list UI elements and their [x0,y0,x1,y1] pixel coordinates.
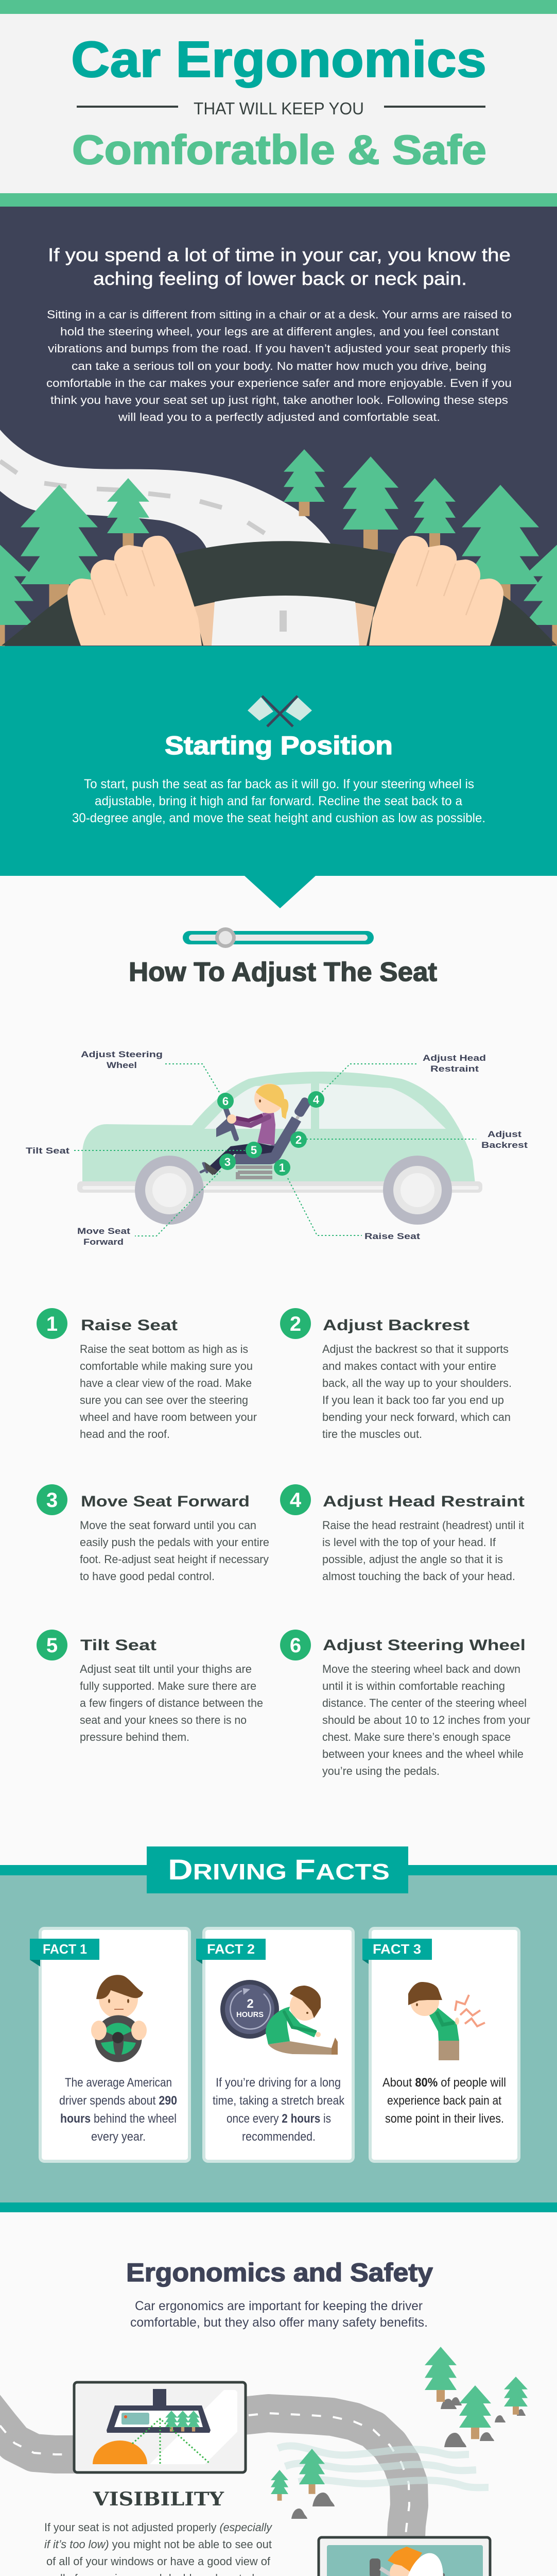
fact card 2 [196,1928,353,2161]
step 4: adjust head restraint: is level with the top of your head. If [322,1536,496,1549]
step 3: move seat forward [37,1484,269,1583]
text: ergonomics intro: comfortable, but they also offer many safety benefits. [130,2315,428,2330]
diagram labels [26,1049,528,1247]
illustration: left hand [67,536,202,646]
step 3: move seat forward: to have good pedal control. [80,1570,215,1583]
illustration: winding road [0,2406,557,2576]
intro heading [48,244,511,289]
heading: how to adjust: How To Adjust The Seat [129,957,437,987]
icon: two hour stretch break [220,1980,338,2055]
tag [362,1939,432,1964]
text: experience back pain at [387,2094,501,2108]
panel: title header [0,0,557,207]
illustration: rocks [20,2397,526,2576]
text: ergonomics intro: Car ergonomics are important for keeping the driver [135,2299,423,2313]
frame: rear view mirror [74,2382,246,2472]
intro paragraph: will lead you to a perfectly adjusted and comfortable seat. [118,411,440,423]
heading: VISIBILITY [93,2488,224,2510]
heading banner: DRIVING FACTS [168,1853,390,1886]
step 6: adjust steering wheel: distance. The center of the steering wheel [322,1697,527,1709]
step 1: raise seat: 1 [46,1313,58,1335]
illustration: forest trees [0,449,557,648]
text [59,2076,177,2144]
text: The average American [65,2076,172,2090]
step 4: adjust head restraint: possible, adjust the angle so that it is [322,1553,503,1566]
icon: driver with steering wheel [91,1975,147,2062]
step 3: move seat forward: easily push the pedals with your entire [80,1536,269,1549]
text: driver spends about 290 [59,2094,177,2108]
diagram labels: Adjust [488,1129,521,1139]
text: If you’re driving for a long [216,2076,341,2090]
diagram labels: Adjust Steering [81,1049,163,1059]
step 1: raise seat: head and the roof. [80,1428,170,1440]
text: if it’s too low) you might not be able to see out [44,2538,272,2551]
diagram labels: Adjust Head [423,1053,486,1063]
step 1: raise seat: comfortable while making sure you [80,1360,253,1372]
tag: FACT 2 [207,1941,255,1957]
text block: To start, push the seat as far back as it will go. If your steering wheel is [84,777,474,791]
step 1: raise seat: wheel and have room between your [79,1411,257,1423]
step 6: adjust steering wheel: 6 [290,1634,301,1657]
illustration: road [0,430,332,551]
icon: two hour stretch break: 2 [247,1997,254,2011]
step 3: move seat forward: 3 [46,1489,58,1512]
text: About 80% of people will [382,2076,506,2090]
text: hours behind the wheel [60,2112,177,2126]
intro paragraph: think you have your seat set up just right, take another look. Following these steps [50,394,508,406]
diagram labels: Move Seat [77,1226,130,1236]
step 5: tilt seat: Adjust seat tilt until your thighs are [80,1663,252,1675]
diagram labels: Backrest [481,1140,528,1150]
fact card 1 [30,1928,189,2161]
step 2: adjust backrest: and makes contact with your entire [322,1360,496,1372]
step 6: adjust steering wheel: chest. Make sure there’s enough space [322,1731,511,1743]
text: ergonomics intro [130,2299,428,2330]
numbered markers: 5 [251,1144,257,1157]
tag: FACT 3 [373,1941,421,1957]
icon: seat slider [183,927,374,948]
step 3: move seat forward: Move Seat Forward [81,1493,250,1510]
step 1: raise seat: Raise Seat [81,1317,178,1334]
intro paragraph: can take a serious toll on your body. No matter how much you drive, being [72,360,486,372]
intro paragraph: vibrations and bumps from the road. If you haven’t adjusted your seat properly this [48,342,511,355]
title line 2: Comforatble & Safe [72,127,486,173]
fact card 3 [362,1928,519,2161]
text: every year. [91,2130,146,2144]
step 4: adjust head restraint: almost touching the back of your head. [322,1570,515,1583]
step 6: adjust steering wheel: Adjust Steering Wheel [323,1637,526,1654]
step 2: adjust backrest: back, all the way up to your shoulders. [322,1377,512,1389]
tag [30,1939,99,1967]
panel: driving facts [0,1846,557,2212]
step 2: adjust backrest: tire the muscles out. [322,1428,422,1440]
step 5: tilt seat: a few fingers of distance between the [80,1697,263,1709]
car windows [204,1083,446,1129]
intro paragraph: hold the steering wheel, your legs are at different angles, and you feel constant [60,325,499,338]
icon: crossed flags [248,696,312,726]
step 4: adjust head restraint: 4 [290,1489,302,1512]
tag: FACT 1 [43,1941,87,1957]
car bumper [77,1181,482,1193]
step 3: move seat forward: foot. Re-adjust seat height if necessary [80,1553,269,1566]
diagram labels: Wheel [107,1060,137,1070]
diagram labels: Raise Seat [364,1231,420,1241]
text block [72,777,485,825]
illustration: right hand [369,536,503,646]
step 6: adjust steering wheel: until it is within comfortable reaching [322,1680,505,1692]
step 2: adjust backrest [280,1308,512,1440]
text block: adjustable, bring it high and far forward. Recline the seat back to a [95,794,462,808]
numbered markers: 3 [224,1156,231,1168]
step 1: raise seat: Raise the seat bottom as high as is [80,1343,248,1355]
intro paragraph: Sitting in a car is different from sitting in a chair or at a desk. Your arms are raised to [47,308,512,321]
text: recommended. [242,2130,316,2144]
heading banner [147,1846,408,1893]
diagram labels: Tilt Seat [26,1146,69,1156]
step 5: tilt seat: Tilt Seat [80,1637,156,1654]
text [213,2076,345,2144]
panel: visibility [44,2382,273,2576]
intro paragraph: comfortable in the car makes your experience safer and more enjoyable. Even if you [46,377,512,389]
intro heading: aching feeling of lower back or neck pain. [93,268,467,289]
illustration: wind lines [278,2446,489,2487]
panel: starting position [0,646,557,908]
intro heading: If you spend a lot of time in your car, you know the [48,244,511,265]
heading: ergonomics and safety: Ergonomics and Safety [126,2258,433,2287]
step 5: tilt seat [37,1630,263,1743]
panel: crash safety [287,2537,519,2576]
leader lines [74,1064,476,1236]
diagram labels: Restraint [430,1064,479,1074]
step 1: raise seat: sure you can see over the steering [80,1394,248,1406]
intro paragraph [46,308,512,423]
step 2: adjust backrest: Adjust the backrest so that it supports [322,1343,509,1355]
step 3: move seat forward: Move the seat forward until you can [80,1519,256,1532]
text: once every 2 hours is [227,2112,331,2126]
subtitle [77,99,485,118]
car wheels [135,1156,452,1225]
step 6: adjust steering wheel: between your knees and the wheel while [322,1748,524,1760]
step 4: adjust head restraint: Raise the head restraint (headrest) until it [322,1519,524,1532]
step 6: adjust steering wheel: should be about 10 to 12 inches from your [322,1714,530,1726]
step 4: adjust head restraint [280,1484,525,1583]
illustration: scenery trees [20,2347,528,2576]
frame: airbag [319,2537,490,2576]
numbered markers: 2 [295,1133,302,1146]
step 5: tilt seat: 5 [46,1634,58,1657]
step 4: adjust head restraint: Adjust Head Restraint [323,1493,525,1510]
step 2: adjust backrest: bending your neck forward, which can [322,1411,511,1423]
heading: Starting Position [165,731,393,760]
numbered markers [217,1091,324,1176]
step 6: adjust steering wheel: Move the steering wheel back and down [322,1663,520,1675]
step 6: adjust steering wheel [280,1630,530,1777]
step 5: tilt seat: fully supported. Make sure there are [80,1680,256,1692]
driver [201,1083,288,1175]
tag [196,1939,266,1964]
step 5: tilt seat: seat and your knees so there is no [80,1714,247,1726]
text [382,2076,506,2126]
text: If your seat is not adjusted properly (especially [44,2521,273,2534]
step 5: tilt seat: pressure behind them. [80,1731,189,1743]
diagram: car and seat [26,1049,528,1247]
numbered markers: 1 [279,1161,285,1174]
subtitle: THAT WILL KEEP YOU [194,99,364,118]
seat [234,1096,312,1179]
step 1: raise seat: have a clear view of the road. Make [80,1377,252,1389]
icon: two hour stretch break: HOURS [236,2010,264,2019]
text: time, taking a stretch break [213,2094,345,2108]
diagram labels: Forward [83,1237,124,1247]
step 2: adjust backrest: If you lean it back too far you end up [322,1394,504,1406]
step 2: adjust backrest: Adjust Backrest [323,1317,469,1334]
text block: 30-degree angle, and move the seat height and cushion as low as possible. [72,811,485,825]
step 2: adjust backrest: 2 [290,1313,301,1335]
text: some point in their lives. [385,2112,504,2126]
step 6: adjust steering wheel: you’re using the pedals. [322,1765,440,1777]
panel: intro [0,207,557,648]
step 1: raise seat [37,1308,257,1440]
icon: back pain [408,1982,485,2060]
text [44,2521,273,2576]
text: of all of your windows or have a good view of [46,2555,271,2568]
illustration: steering wheel [2,541,557,646]
numbered markers: 4 [313,1093,320,1106]
numbered markers: 6 [222,1095,229,1108]
car body [82,1072,476,1193]
title line 1: Car Ergonomics [71,31,486,88]
